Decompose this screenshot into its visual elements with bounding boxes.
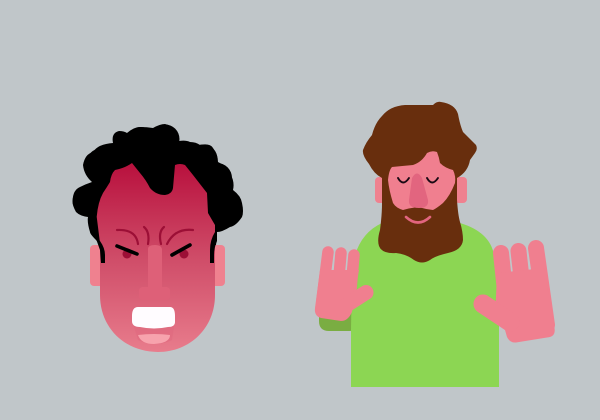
- raised left hand: [315, 252, 366, 321]
- curly black hair: [72, 124, 243, 245]
- mouth shadow: [132, 320, 175, 344]
- right hair strand: [210, 232, 217, 263]
- closed right eye: [427, 178, 438, 182]
- nose: [409, 174, 428, 208]
- green dark sleeve: [319, 277, 359, 331]
- icon: left ear: [90, 245, 110, 286]
- forehead wrinkles: [117, 227, 193, 244]
- pink face: [388, 151, 455, 210]
- green torso: [351, 223, 499, 387]
- tongue: [138, 334, 170, 344]
- angry man head: [72, 124, 243, 352]
- nose: [139, 245, 170, 300]
- icon: right ear: [455, 177, 467, 203]
- red gradient face: [97, 163, 215, 352]
- calm bearded man: [315, 102, 555, 387]
- icon: left ear: [375, 177, 387, 203]
- white teeth: [132, 307, 175, 328]
- left eye: [117, 246, 137, 258]
- right eye: [172, 245, 190, 258]
- icon: right ear: [205, 245, 225, 286]
- closed left eye: [398, 178, 409, 182]
- left hair strand: [95, 236, 105, 263]
- smile: [406, 217, 430, 222]
- brown hair and beard: [363, 102, 477, 262]
- raised right hand: [483, 248, 555, 343]
